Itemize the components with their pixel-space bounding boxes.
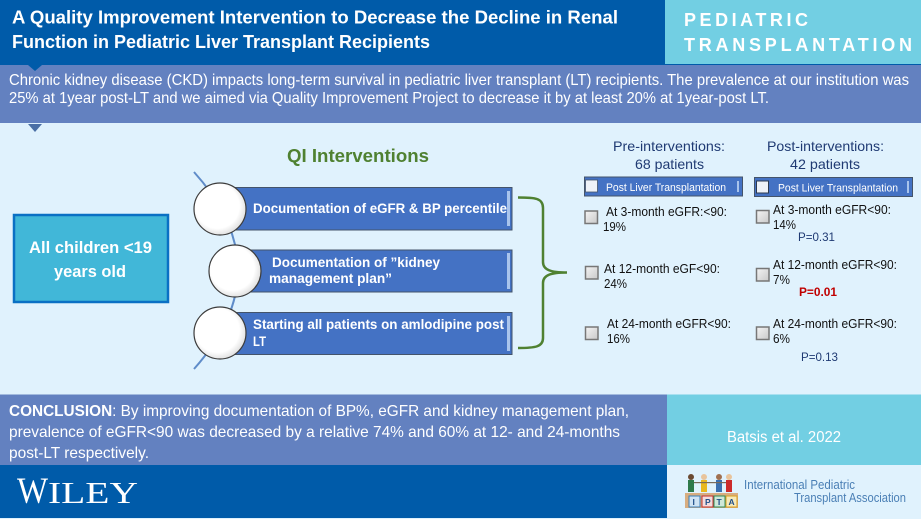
post row: 24 month: At 24-month eGFR<90:	[773, 317, 897, 331]
association name: Transplant Association	[794, 491, 906, 505]
intervention 1	[194, 183, 512, 235]
title: A Quality Improvement Intervention to Decrease the Decline in Renal	[12, 6, 618, 28]
column heading: 68 patients	[635, 156, 704, 172]
journal name panel: TRANSPLANTATION	[684, 35, 912, 55]
post row: 3 month: P=0.31	[798, 230, 835, 244]
icon: children on blocks: T	[716, 497, 722, 507]
column: pre-interventions	[584, 138, 742, 346]
pre row: 3 month: At 3-month eGFR:<90:	[606, 205, 727, 219]
intervention 3: Starting all patients on amlodipine post	[253, 317, 504, 332]
intervention 2: management plan”	[269, 271, 392, 286]
IPTA logo	[685, 474, 906, 508]
pre row: 3 month: 19%	[603, 220, 626, 234]
column: post-interventions	[754, 138, 912, 364]
population box	[14, 215, 168, 302]
intervention 3	[194, 307, 512, 359]
conclusion panel: CONCLUSION: By improving documentation of BP%, eGFR and kidney management plan,	[9, 403, 629, 420]
intervention 2: Documentation of ”kidney	[272, 255, 440, 270]
header band with title	[0, 0, 921, 65]
title: Function in Pediatric Liver Transplant Recipients	[12, 31, 430, 52]
intervention 2	[209, 245, 512, 297]
arrow: section pointer	[28, 124, 42, 132]
pre row: 12 month: At 12-month eGF<90:	[604, 262, 720, 276]
intervention 1: Documentation of eGFR & BP percentile	[253, 201, 507, 216]
post liver transplantation bar	[584, 177, 742, 196]
pre row: 24 month: At 24-month eGFR<90:	[607, 317, 731, 331]
icon: children on blocks: I	[692, 497, 695, 507]
conclusion panel: post-LT respectively.	[9, 445, 149, 462]
Wiley wordmark: ILEY	[48, 475, 138, 510]
heading: QI Interventions: QI Interventions	[287, 145, 429, 166]
post row: 12 month: P=0.01	[799, 285, 837, 299]
post row: 3 month	[756, 203, 891, 244]
pre row: 12 month	[586, 262, 720, 291]
post liver transplantation bar: Post Liver Transplantation	[778, 182, 898, 194]
citation panel: Batsis et al. 2022	[727, 429, 841, 446]
column heading: Pre-interventions:	[613, 138, 725, 154]
population box: years old	[54, 262, 126, 281]
conclusion panel: prevalence of eGFR<90 was decreased by a relative 74% and 60% at 12- and 24-months	[9, 424, 620, 441]
brace connecting interventions to results	[518, 198, 567, 348]
intervention 3: LT	[253, 334, 267, 349]
post row: 3 month: 14%	[773, 218, 796, 232]
post liver transplantation bar	[754, 178, 912, 196]
publisher band	[0, 465, 667, 518]
citation panel	[667, 394, 921, 465]
association name	[744, 478, 906, 505]
post liver transplantation bar: Post Liver Transplantation	[606, 182, 726, 194]
post row: 12 month: At 12-month eGFR<90:	[773, 258, 897, 272]
QI interventions list	[194, 172, 512, 369]
journal name panel: PEDIATRIC	[684, 10, 808, 30]
post row: 12 month	[756, 258, 897, 299]
post row: 24 month: P=0.13	[801, 350, 838, 364]
conclusion panel	[0, 394, 667, 465]
pre row: 3 month	[585, 205, 727, 234]
title	[12, 6, 618, 52]
column heading: Post-interventions:	[767, 138, 884, 154]
column heading	[767, 138, 884, 172]
Wiley wordmark: W	[17, 471, 48, 512]
association name: International Pediatric	[744, 478, 855, 492]
icon: children on blocks	[685, 474, 738, 508]
journal name panel	[665, 0, 921, 64]
column heading	[613, 138, 725, 172]
pre row: 12 month: 24%	[604, 277, 627, 291]
post row: 12 month: 7%	[773, 273, 790, 287]
icon: children on blocks: P	[705, 497, 711, 507]
background statement panel	[0, 65, 921, 123]
icon: children on blocks: A	[728, 497, 735, 507]
post row: 24 month: 6%	[773, 332, 790, 346]
post row: 3 month: At 3-month eGFR<90:	[773, 203, 891, 217]
post row: 24 month	[756, 317, 897, 364]
column heading: 42 patients	[790, 156, 860, 172]
pre row: 24 month: 16%	[607, 332, 630, 346]
population box: All children <19	[29, 238, 152, 257]
background statement panel: 25% at 1year post-LT and we aimed via Quality Improvement Project to decrease it by at least 20% at 1year-post LT.	[9, 90, 769, 107]
pre row: 24 month	[586, 317, 731, 346]
